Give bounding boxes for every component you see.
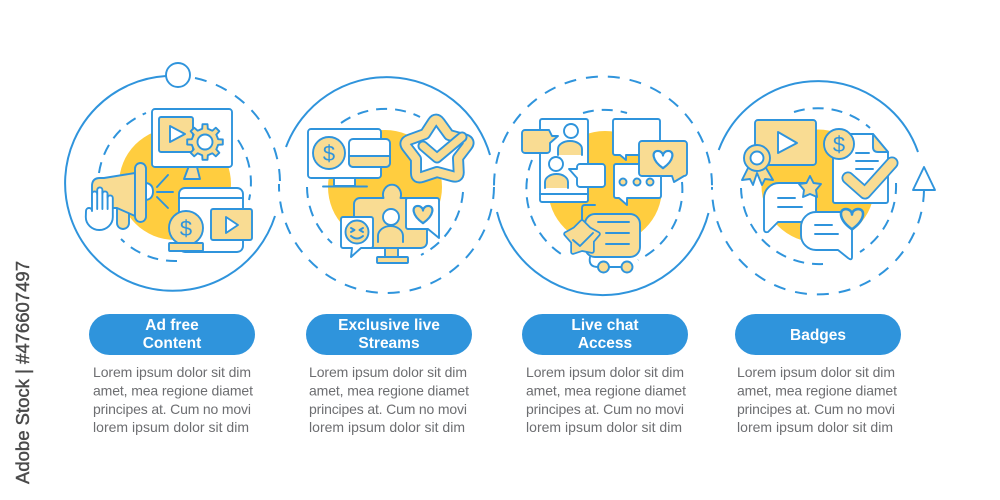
yellow disc bbox=[328, 130, 442, 244]
icon: speech bubbles bbox=[764, 176, 863, 259]
pill heading bbox=[338, 317, 440, 352]
icon: award badge bbox=[742, 145, 773, 185]
label pill bbox=[306, 314, 472, 355]
arrow head bbox=[913, 167, 935, 190]
yellow disc bbox=[548, 131, 662, 245]
icon: video tile bbox=[755, 120, 816, 165]
ring: live streams bbox=[279, 77, 494, 293]
stock watermark id: Adobe Stock | #476607497 bbox=[12, 261, 33, 484]
pill heading: Content bbox=[143, 335, 201, 352]
body text: Lorem ipsum dolor sit dim bbox=[309, 364, 467, 380]
body text: Lorem ipsum dolor sit dim bbox=[526, 364, 684, 380]
body text: Lorem ipsum dolor sit dim bbox=[93, 364, 251, 380]
ring: badges bbox=[712, 81, 924, 294]
pill heading: Badges bbox=[790, 327, 846, 344]
body text: amet, mea regione diamet bbox=[526, 382, 686, 398]
body text: lorem ipsum dolor sit dim bbox=[737, 419, 893, 435]
pill heading bbox=[143, 317, 201, 352]
body text: amet, mea regione diamet bbox=[737, 382, 897, 398]
label pill bbox=[735, 314, 901, 355]
yellow disc bbox=[762, 130, 874, 242]
icon: video window with coin: $ bbox=[180, 216, 192, 241]
icon: payment monitor: $ bbox=[323, 141, 335, 166]
body text: principes at. Cum no movi bbox=[93, 401, 251, 417]
pill heading: Ad free bbox=[145, 317, 199, 334]
body text: lorem ipsum dolor sit dim bbox=[526, 419, 682, 435]
icon: monitor with video and gear bbox=[152, 109, 232, 179]
pill heading: Access bbox=[578, 335, 632, 352]
body text bbox=[93, 364, 253, 435]
icon: shopping cart with star bbox=[566, 205, 640, 272]
body text bbox=[737, 364, 897, 435]
icon: payment monitor bbox=[308, 129, 390, 186]
body text: principes at. Cum no movi bbox=[526, 401, 684, 417]
body text: lorem ipsum dolor sit dim bbox=[309, 419, 465, 435]
icon: phone video call bbox=[522, 119, 605, 202]
pill heading: Live chat bbox=[571, 317, 639, 334]
panel: exclusive live streams bbox=[279, 77, 494, 435]
label pill bbox=[522, 314, 688, 355]
body text: principes at. Cum no movi bbox=[737, 401, 895, 417]
body text: amet, mea regione diamet bbox=[93, 382, 253, 398]
icon: megaphone with hand bbox=[86, 163, 173, 230]
body text: lorem ipsum dolor sit dim bbox=[93, 419, 249, 435]
icon: document with check: $ bbox=[833, 132, 845, 157]
body text bbox=[526, 364, 686, 435]
body text: amet, mea regione diamet bbox=[309, 382, 469, 398]
icon: chat bubbles bbox=[613, 119, 687, 205]
ring: ad free bbox=[65, 63, 280, 291]
body text: Lorem ipsum dolor sit dim bbox=[737, 364, 895, 380]
body text: principes at. Cum no movi bbox=[309, 401, 467, 417]
icon: streamer with reactions bbox=[341, 185, 439, 263]
icon: document with check bbox=[824, 129, 892, 203]
ring: live chat bbox=[494, 76, 712, 295]
body text bbox=[309, 364, 469, 435]
pill heading: Exclusive live bbox=[338, 317, 440, 334]
icon: star with check bbox=[405, 120, 469, 177]
panel: badges bbox=[712, 81, 935, 435]
panel: ad free content bbox=[65, 63, 280, 435]
yellow disc bbox=[119, 128, 231, 240]
pill heading: Streams bbox=[358, 335, 420, 352]
pill heading bbox=[571, 317, 639, 352]
panel: live chat access bbox=[494, 76, 712, 435]
icon: video window with coin bbox=[169, 188, 252, 252]
label pill bbox=[89, 314, 255, 355]
